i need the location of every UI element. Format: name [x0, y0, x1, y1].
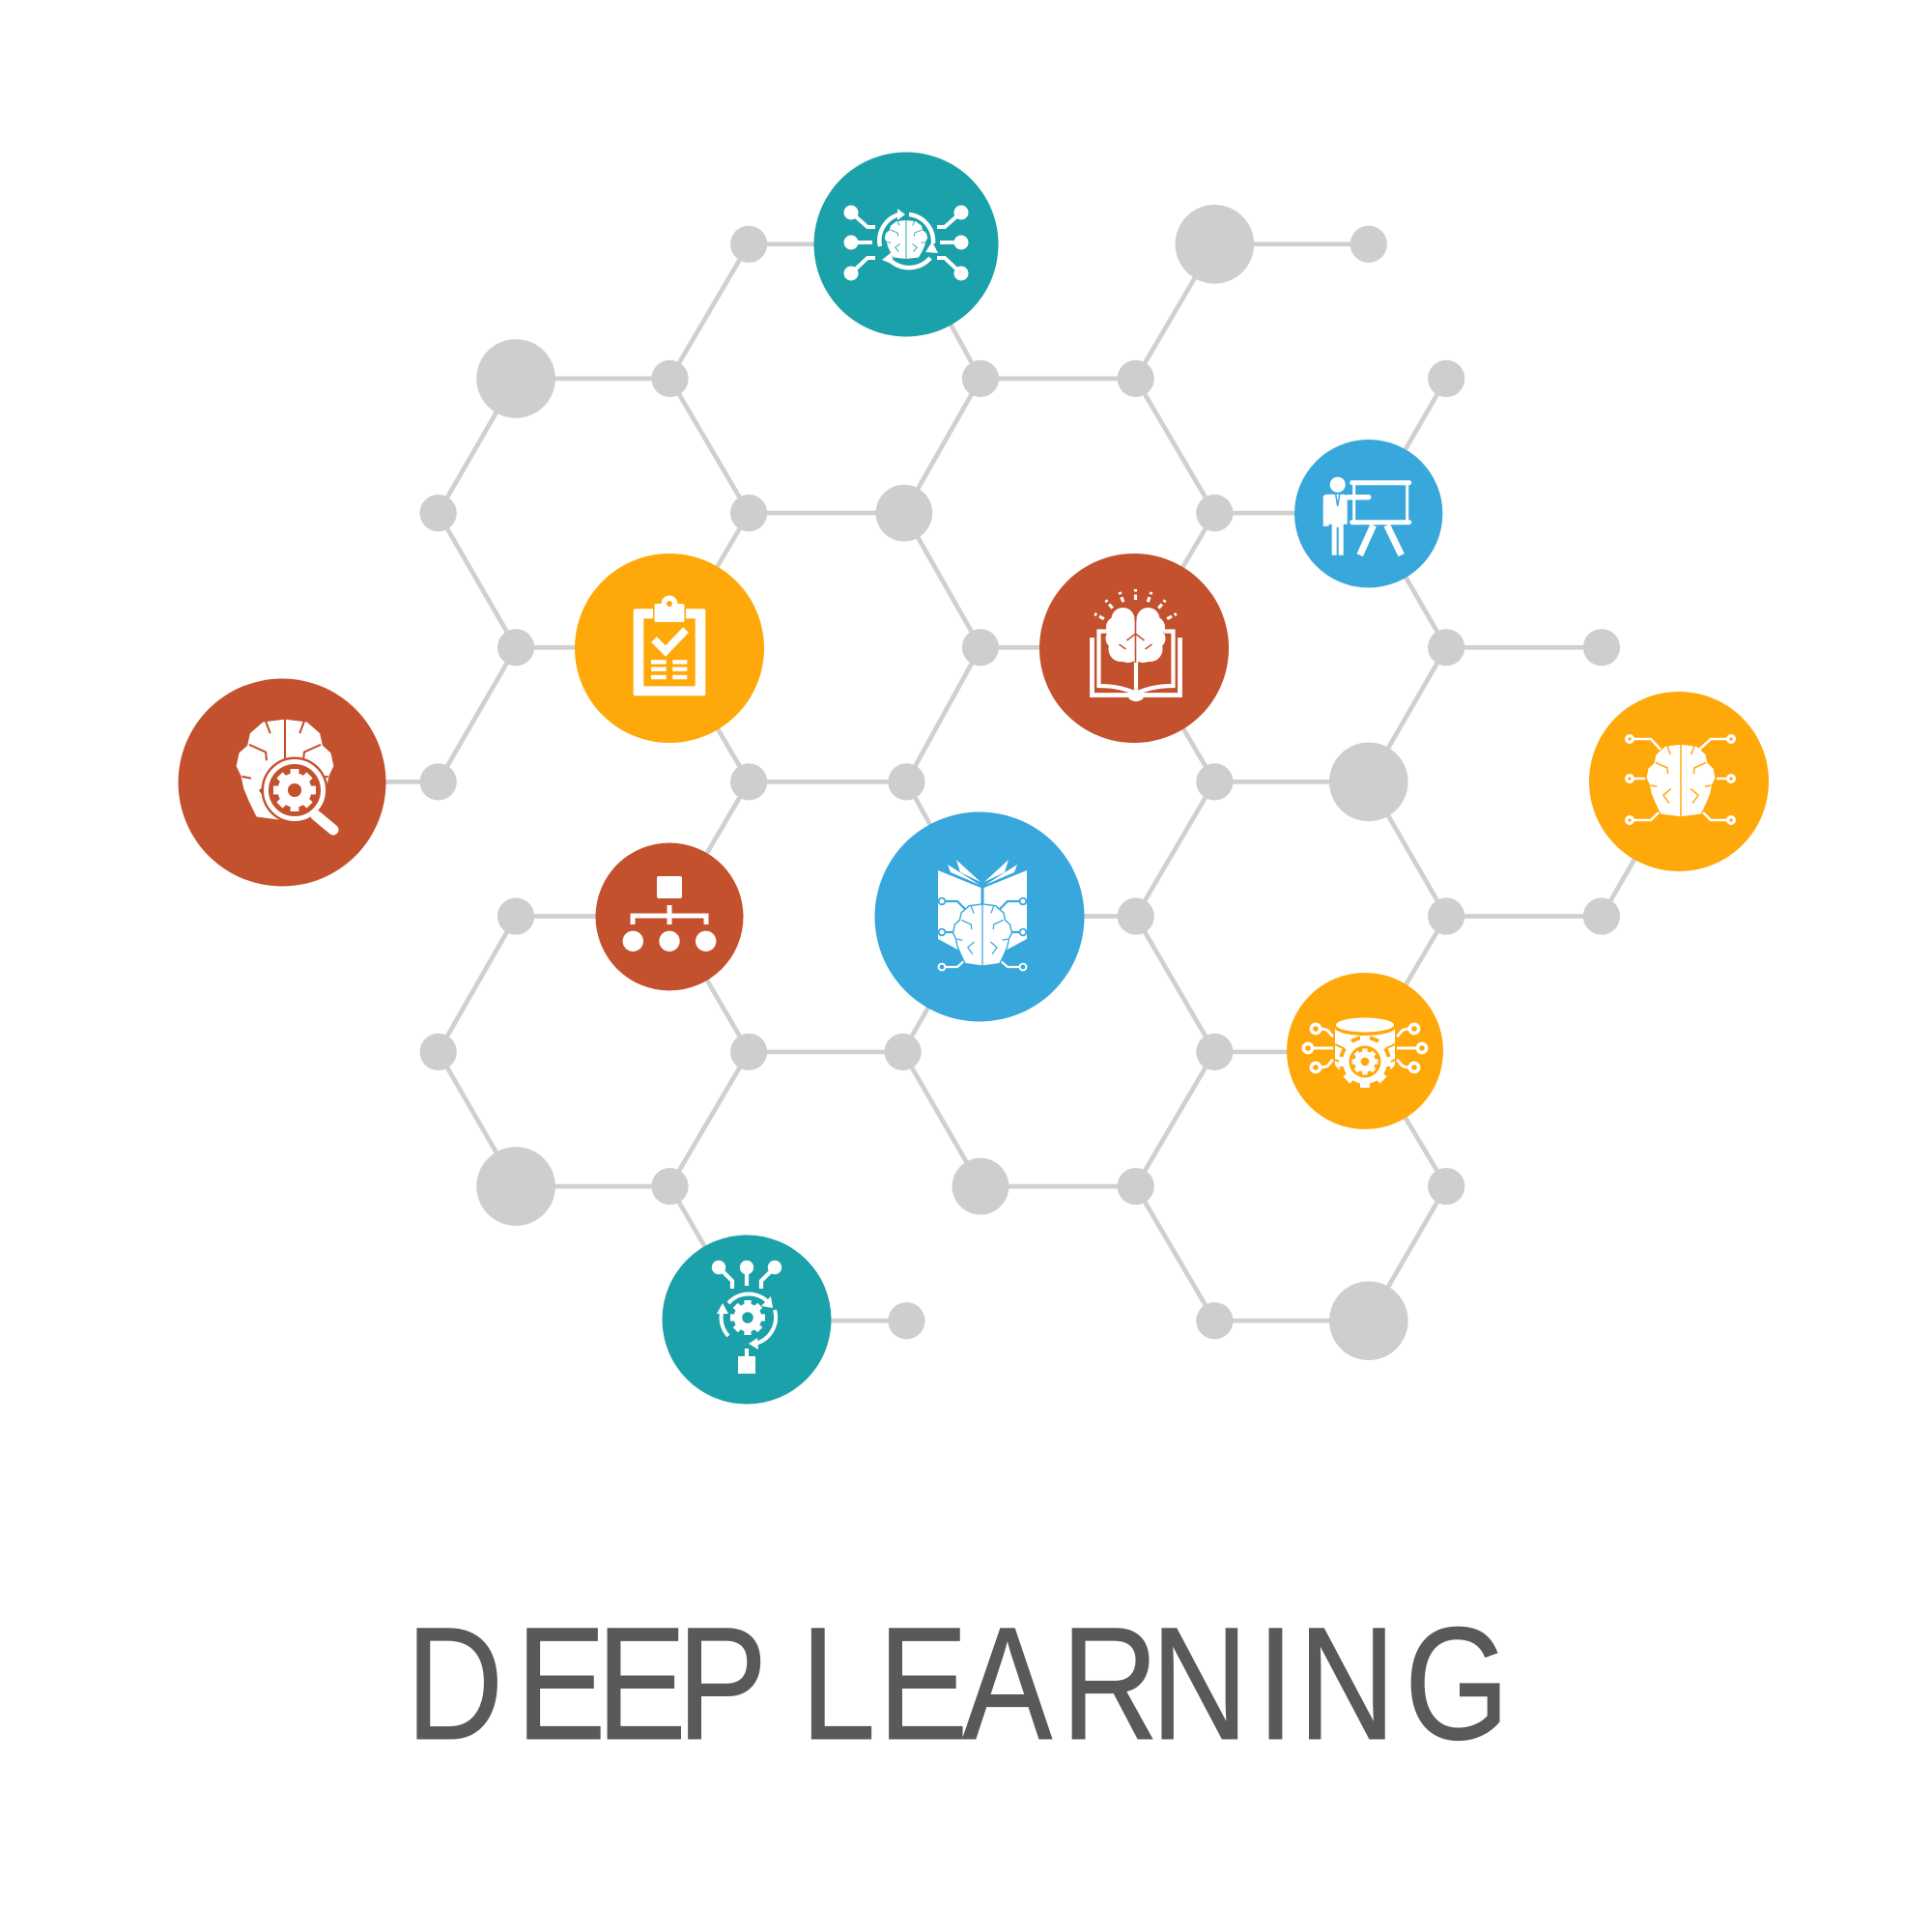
icon: brain with magnifier and gear [178, 678, 386, 887]
title: DEEP LEARNING [406, 1595, 1509, 1774]
icon: gear process with inputs and output [663, 1235, 831, 1405]
icon: book with circuit brain [875, 811, 1084, 1022]
hexagonal network [283, 205, 1679, 1360]
icon: brain with circular arrows and circuit nodes [813, 153, 999, 336]
icon: database with gear and circuits [1287, 973, 1443, 1129]
icon: clipboard checklist [575, 554, 764, 743]
icon: presenter at board [1294, 440, 1442, 587]
icon: brain over open book [1039, 554, 1229, 743]
icon: hierarchy chart [595, 842, 744, 991]
icon: brain with circuit lines [1589, 692, 1769, 871]
